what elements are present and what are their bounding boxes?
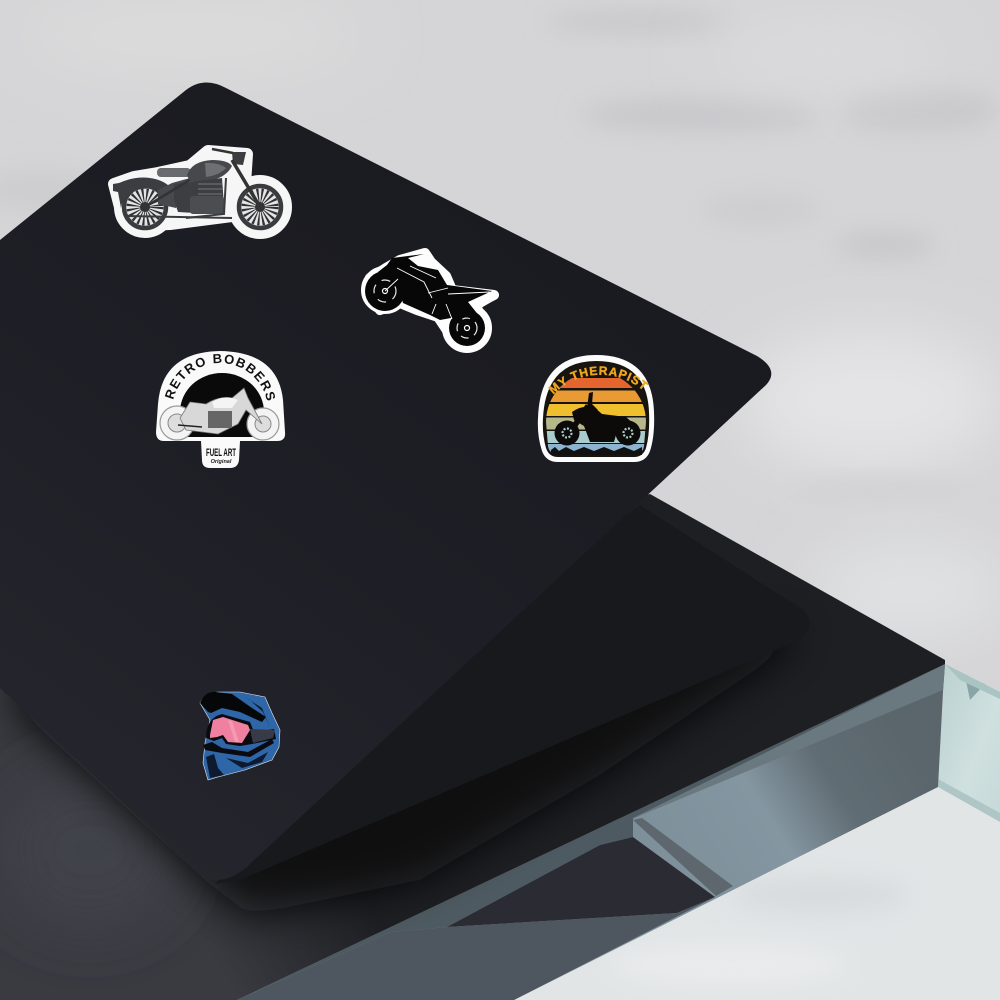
- sticker: Retro Bobbers: [156, 351, 286, 468]
- lower marble tabletop: [505, 785, 1000, 1000]
- motorcycle fairing: [378, 254, 492, 322]
- brand tagline: Original: [211, 459, 232, 465]
- chin guard: [203, 739, 274, 757]
- black tabletop slab: [0, 494, 945, 1000]
- laptop lid: [0, 82, 771, 880]
- helmet shell: [200, 692, 280, 780]
- helmet shadow details: [206, 697, 270, 778]
- lid shadow on table: [0, 600, 800, 915]
- front wheel: [449, 310, 485, 346]
- sticker: sport motorcycle: [365, 253, 494, 348]
- black dome: [180, 373, 264, 437]
- glass table front face: [237, 664, 945, 1000]
- rear wheel: [124, 186, 166, 228]
- arched text: MY THERAPIST: [548, 366, 649, 394]
- lens highlight: [228, 720, 239, 742]
- sticker: My Therapist: [538, 355, 654, 462]
- sticker die-cut border: [156, 351, 285, 468]
- sunset stripes: [546, 378, 646, 452]
- laptop base: [215, 505, 810, 884]
- visor peak: [200, 692, 266, 722]
- sticker die-cut border: [538, 355, 654, 462]
- grass strip: [551, 447, 642, 455]
- bobber motorcycle illustration: [160, 388, 279, 440]
- motorcycle body: [113, 149, 260, 218]
- goggle lens: [210, 717, 250, 743]
- arched title: RETRO BOBBERS: [164, 354, 275, 400]
- rear wheel: [365, 271, 405, 311]
- glass table side: [938, 664, 1000, 822]
- goggle strap: [250, 729, 275, 743]
- sticker: classic motorcycle: [113, 149, 286, 233]
- sticker die-cut border: [366, 253, 494, 348]
- goggles frame: [206, 714, 276, 746]
- sticker die-cut border: [114, 151, 286, 233]
- dark reflection panel: [237, 818, 733, 1000]
- text arc path: [552, 375, 646, 396]
- brand text: FUEL ART: [206, 447, 236, 459]
- title arc path: [172, 363, 268, 411]
- front wheel: [239, 186, 281, 228]
- motorcycle silhouette: [554, 392, 640, 446]
- dark badge: [543, 361, 649, 457]
- sticker: blue helmet: [200, 692, 280, 780]
